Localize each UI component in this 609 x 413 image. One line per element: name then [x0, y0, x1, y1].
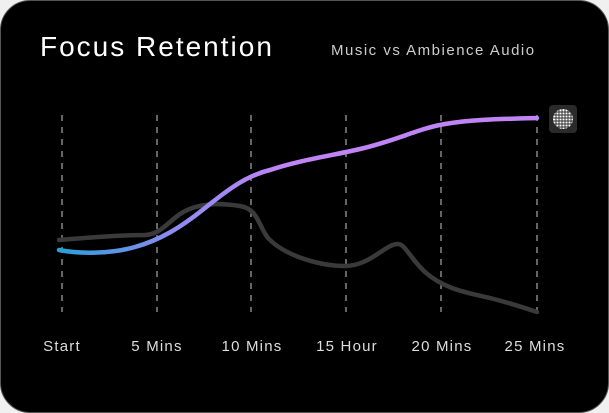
x-axis labels [43, 338, 565, 355]
x-axis labels: Start [43, 338, 81, 355]
x-axis labels: 25 Mins [505, 338, 565, 355]
x-axis labels: 5 Mins [131, 338, 183, 355]
x-axis labels: 20 Mins [412, 338, 472, 355]
x-axis labels: 10 Mins [222, 338, 282, 355]
x-axis labels: 15 Hour [316, 338, 378, 355]
line: ambience (gray) [59, 204, 537, 312]
title: Focus Retention [40, 31, 274, 62]
subtitle: Music vs Ambience Audio [331, 42, 536, 59]
line: music (gradient) [59, 118, 537, 253]
icon: dot grid [549, 105, 577, 133]
